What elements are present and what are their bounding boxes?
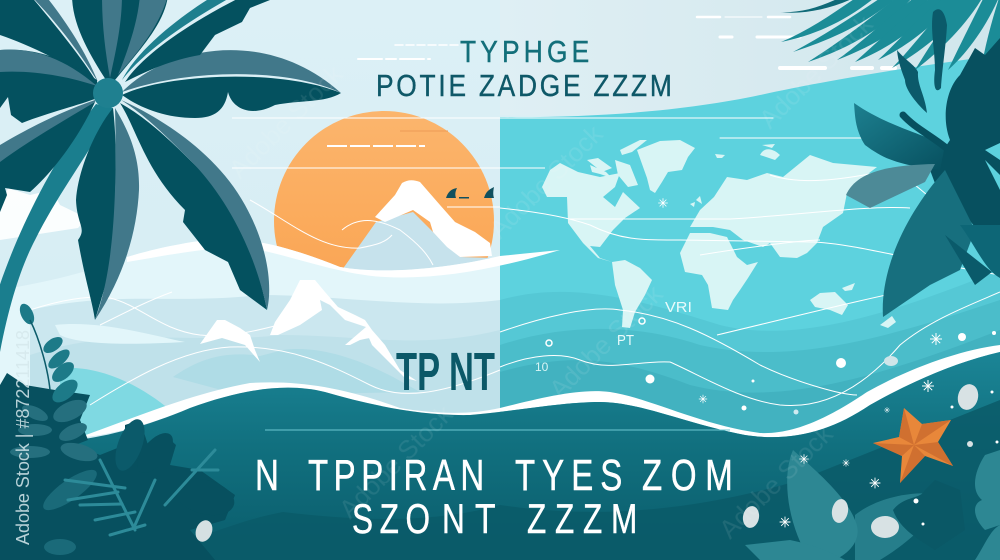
north america	[542, 163, 640, 262]
faint diagonal watermarks: Adobe Stock	[483, 118, 609, 244]
back mountain	[342, 180, 495, 275]
south america	[612, 260, 652, 328]
white shore wave upper	[127, 239, 560, 277]
faint diagonal watermarks	[223, 8, 879, 544]
bottom left foliage	[0, 301, 238, 560]
thin wind lines left	[30, 292, 500, 405]
sea horizon line	[265, 429, 730, 431]
title line 1: TYPHGE	[460, 35, 589, 70]
thin lines over sun	[250, 200, 500, 265]
greenland	[637, 140, 695, 193]
map label VRI: VRI	[665, 299, 692, 316]
map label PT: PT	[617, 332, 634, 349]
faint diagonal watermarks: Adobe Stock	[543, 278, 669, 404]
sky background right	[500, 0, 1000, 116]
big leaf	[787, 450, 858, 560]
white shore wave lower	[77, 345, 1000, 438]
stones	[741, 382, 981, 538]
leaf: right	[122, 50, 341, 118]
turquoise map panel	[500, 55, 1000, 420]
upper curled leaves	[897, 9, 947, 113]
leaf: upper left	[0, 0, 98, 84]
feather branches	[65, 450, 218, 535]
pebble	[193, 518, 215, 544]
palm leaves	[0, 0, 341, 320]
main dark body	[930, 38, 1000, 240]
sky speed dashes	[358, 17, 895, 138]
right dark tropical leaves	[846, 9, 1000, 317]
australia	[810, 292, 848, 315]
translucent leaf	[846, 164, 935, 208]
headline line 2	[352, 495, 637, 543]
africa	[680, 233, 758, 310]
headline line 1: TYES	[515, 452, 622, 500]
sun	[274, 111, 494, 331]
map pin markers	[546, 318, 645, 346]
leaf: lower right	[120, 100, 269, 310]
map wind lines	[500, 168, 1000, 406]
fern stem	[30, 320, 50, 390]
birds	[446, 187, 494, 198]
stock id vertical text: Adobe Stock | #872211418	[12, 330, 33, 545]
eurasia	[690, 155, 877, 258]
headline line 1: ZOM	[642, 452, 733, 500]
faint diagonal watermarks: Adobe Stock	[713, 418, 839, 544]
sea dots and sparkles	[646, 108, 996, 414]
top right palm fronds	[780, 0, 1000, 75]
right panel wave bands	[500, 270, 1000, 440]
arctic islands	[587, 140, 647, 187]
left landscape lower bands	[0, 239, 500, 438]
title line 2: POTIE ZADGE ZZZM	[376, 69, 672, 104]
headline line 2: SZO	[352, 495, 430, 542]
headline line 1: N	[255, 452, 279, 500]
starfish	[873, 408, 953, 483]
left leaf	[854, 103, 945, 170]
palm trunk	[0, 104, 113, 352]
front mountain	[173, 280, 420, 395]
white blobs at the left	[0, 188, 87, 240]
faint diagonal watermarks: Adobe Stock	[333, 398, 459, 524]
mid leaf	[855, 493, 945, 560]
sea dark foreground	[0, 400, 1000, 560]
bottom leaf	[745, 540, 845, 560]
faint diagonal watermarks: Adobe Stock	[753, 8, 879, 134]
dark heart leaf	[893, 480, 965, 550]
leaf: up	[72, 0, 168, 80]
headline line 1: TPPIRAN	[308, 452, 484, 500]
map label 10: 10	[535, 360, 549, 374]
sea lower band	[0, 352, 1000, 560]
headline line 2: ZZZM	[527, 495, 637, 542]
headline line 2: N	[442, 495, 465, 542]
right leaf	[975, 450, 1000, 530]
oval leaves	[109, 416, 238, 521]
small islands	[690, 144, 896, 328]
center label TP NT: TP NT	[396, 342, 495, 402]
headline line 2: T	[475, 497, 496, 543]
headline line 1	[255, 452, 733, 500]
faint diagonal watermarks: Adobe Stock	[223, 58, 349, 184]
stem highlights	[903, 115, 945, 147]
fern leaves	[10, 301, 102, 555]
leaf: down	[76, 108, 139, 320]
dark foliage mass	[0, 373, 235, 560]
leaf: upper right	[122, 0, 270, 82]
leaf: left	[0, 50, 97, 123]
lower leaf	[883, 170, 975, 317]
sun light band lines	[232, 118, 500, 168]
palm crown	[93, 78, 123, 108]
bottom right teal leaves	[745, 450, 1000, 560]
bottom right sparkles and dots	[780, 380, 998, 527]
leaf: lower left	[0, 100, 95, 212]
lower right leaf	[960, 225, 1000, 278]
world map	[542, 140, 896, 328]
